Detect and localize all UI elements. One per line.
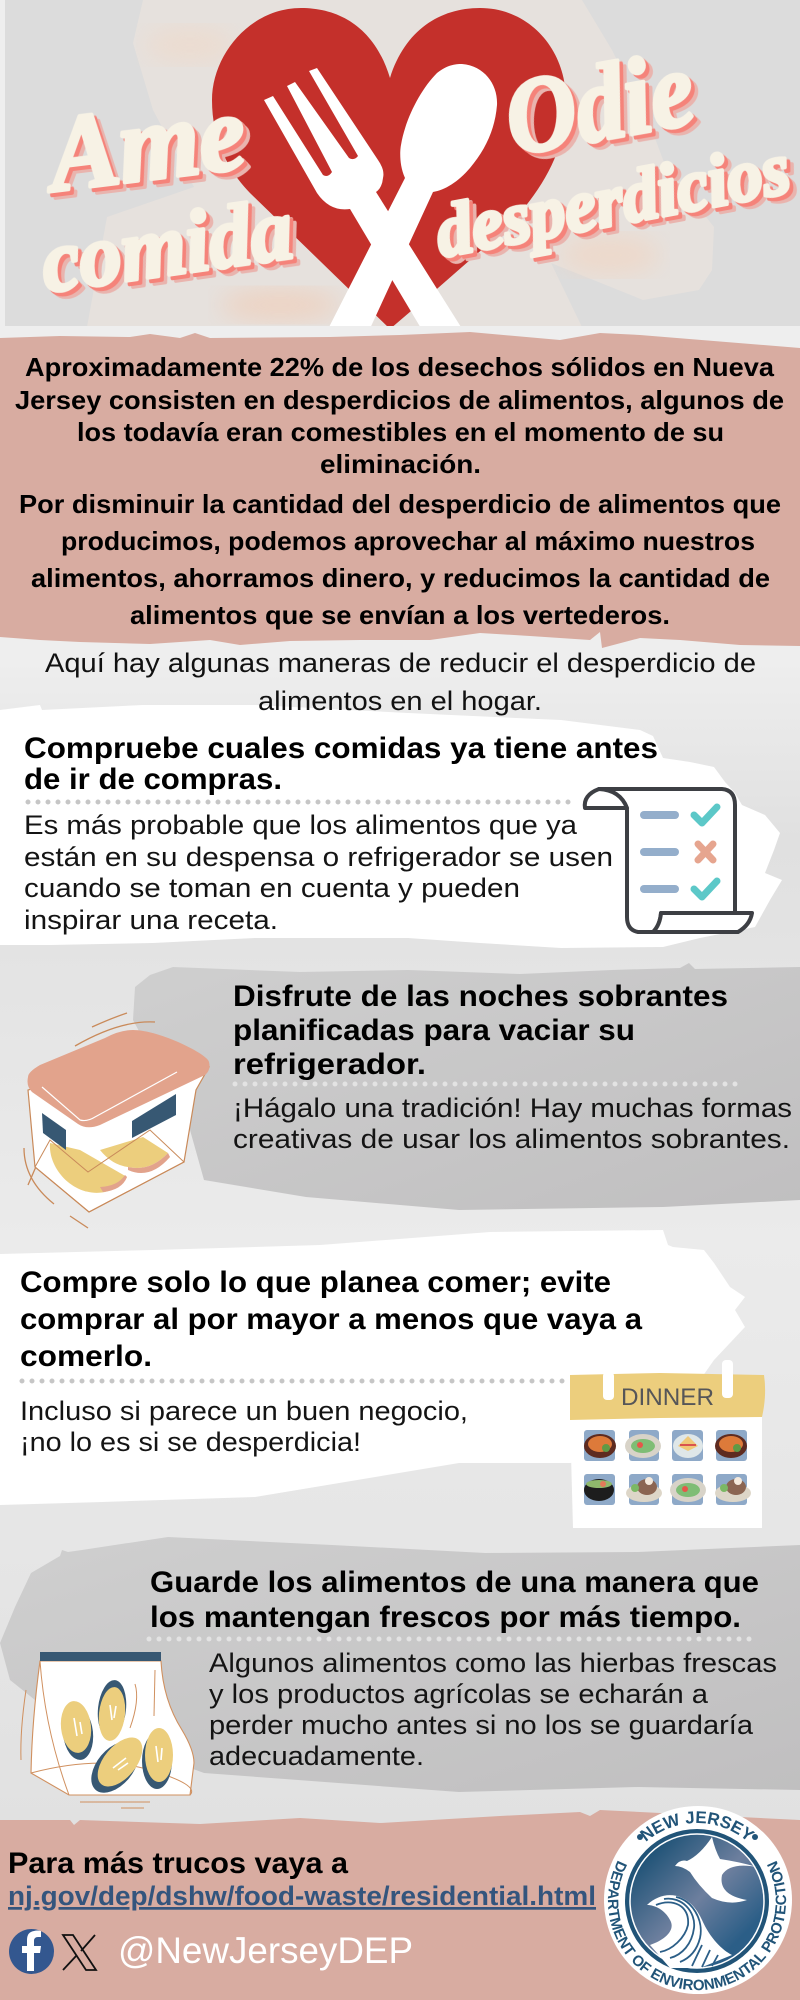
text: tip 4 body: [209, 1648, 777, 1771]
link: website: nj.gov/dep/dshw/food-waste/residential.html: [8, 1881, 596, 1911]
title: Odie: Odie: [497, 29, 702, 179]
text: intro sentence: Aquí hay algunas maneras de reducir el desperdicio de: [45, 648, 756, 678]
text: tip 2 body: creativas de usar los alimentos sobrantes.: [233, 1124, 790, 1154]
text: benefits of reducing waste: producimos, podemos aprovechar al máximo nuestros: [61, 526, 755, 556]
panel: tip 1 check what you have: [0, 705, 782, 948]
heading: tip 2: planificadas para vaciar su: [233, 1014, 635, 1047]
heading: tip 4: [150, 1566, 759, 1634]
text: food waste statistic: eliminación.: [320, 449, 481, 479]
icon: fork: [264, 68, 466, 335]
text: tip 4 body: adecuadamente.: [209, 1741, 424, 1771]
panel: tip 2 planned leftovers: [24, 963, 800, 1228]
text: food waste statistic: [15, 352, 784, 479]
text: tip 4 body: Algunos alimentos como las hierbas frescas: [209, 1648, 777, 1678]
label: DINNER: DINNER: [621, 1384, 714, 1411]
text: food waste statistic: Aproximadamente 22% de los desechos sólidos en Nueva: [25, 352, 775, 382]
heading: tip 2: Disfrute de las noches sobrantes: [233, 980, 728, 1013]
text: tip 1 body: inspirar una receta.: [24, 905, 278, 935]
header illustration: [5, 0, 800, 335]
panel: tip 4 store food properly: [0, 1537, 800, 1808]
heading: tip 3: [20, 1266, 642, 1373]
text: food waste statistic: los todavía eran comestibles en el momento de su: [77, 417, 724, 447]
text: benefits of reducing waste: alimentos que se envían a los vertederos.: [130, 600, 670, 630]
text: tip 1 body: Es más probable que los alimentos que ya: [24, 810, 578, 840]
panel: footer: [0, 1806, 800, 2000]
icon: heart: [212, 8, 566, 329]
text: intro sentence: [45, 648, 756, 716]
text: benefits of reducing waste: [19, 489, 781, 630]
text: more tips: Para más trucos vaya a: [8, 1847, 348, 1880]
text: food waste statistic: Jersey consisten en desperdicios de alimentos, algunos de: [15, 385, 784, 415]
food tiles: [584, 1430, 751, 1505]
heading: tip 1: de ir de compras.: [24, 763, 282, 796]
text: tip 4 body: perder mucho antes si no los se guardaría: [209, 1710, 754, 1740]
text: tip 2 body: ¡Hágalo una tradición! Hay muchas formas: [233, 1093, 792, 1123]
heading: tip 2: [233, 980, 728, 1081]
heading: tip 2: refrigerador.: [233, 1048, 426, 1081]
heading: tip 1: [24, 732, 658, 796]
icon: leftovers container: [24, 1013, 210, 1228]
text: tip 1 body: [24, 810, 613, 935]
heading: tip 3: comerlo.: [20, 1340, 152, 1373]
heading: tip 4: Guarde los alimentos de una manera que: [150, 1566, 759, 1599]
text: tip 3 body: [20, 1396, 468, 1457]
text: tip 4 body: y los productos agrícolas se echarán a: [209, 1679, 709, 1709]
text: benefits of reducing waste: Por disminuir la cantidad del desperdicio de alimentos que: [19, 489, 781, 519]
icon: facebook: [9, 1929, 54, 1974]
text: tip 1 body: cuando se toman en cuenta y pueden: [24, 873, 520, 903]
icon: X: [63, 1935, 96, 1970]
panel: introduction: [0, 332, 800, 648]
title: Ame: Ame: [37, 73, 251, 216]
heading: tip 4: los mantengan frescos por más tiempo.: [150, 1601, 741, 1634]
white torn strip under header: [0, 0, 800, 345]
text: tip 2 body: [233, 1093, 792, 1154]
icon: spoon: [325, 64, 497, 335]
seal: NJ Department of Environmental Protection: DEPARTMENT OF ENVIRONMENTAL PROTECTION: [608, 1860, 786, 1990]
text: tip 3 body: Incluso si parece un buen negocio,: [20, 1396, 468, 1426]
title: comida: comida: [35, 181, 298, 312]
heading: tip 3: comprar al por mayor a menos que vaya a: [20, 1303, 642, 1336]
icon: checklist scroll: [585, 789, 752, 932]
icon: storage bag with cucumber slices: [21, 1652, 194, 1808]
panel: tip 3 buy only what you plan to eat: [0, 1230, 765, 1528]
text: tip 1 body: están en su despensa o refrigerador se usen: [24, 842, 613, 872]
seal: NJ Department of Environmental Protection: NEW JERSEY: [640, 1811, 755, 1842]
text: benefits of reducing waste: alimentos, ahorramos dinero, y reducimos la cantidad de: [31, 563, 770, 593]
icon: dinner calendar: [570, 1360, 765, 1528]
text: intro sentence: alimentos en el hogar.: [258, 686, 542, 716]
text: social handle: @NewJerseyDEP: [118, 1930, 413, 1971]
heading: tip 3: Compre solo lo que planea comer; evite: [20, 1266, 611, 1299]
heading: tip 1: Compruebe cuales comidas ya tiene antes: [24, 732, 658, 765]
text: tip 3 body: ¡no lo es si se desperdicia!: [20, 1427, 361, 1457]
